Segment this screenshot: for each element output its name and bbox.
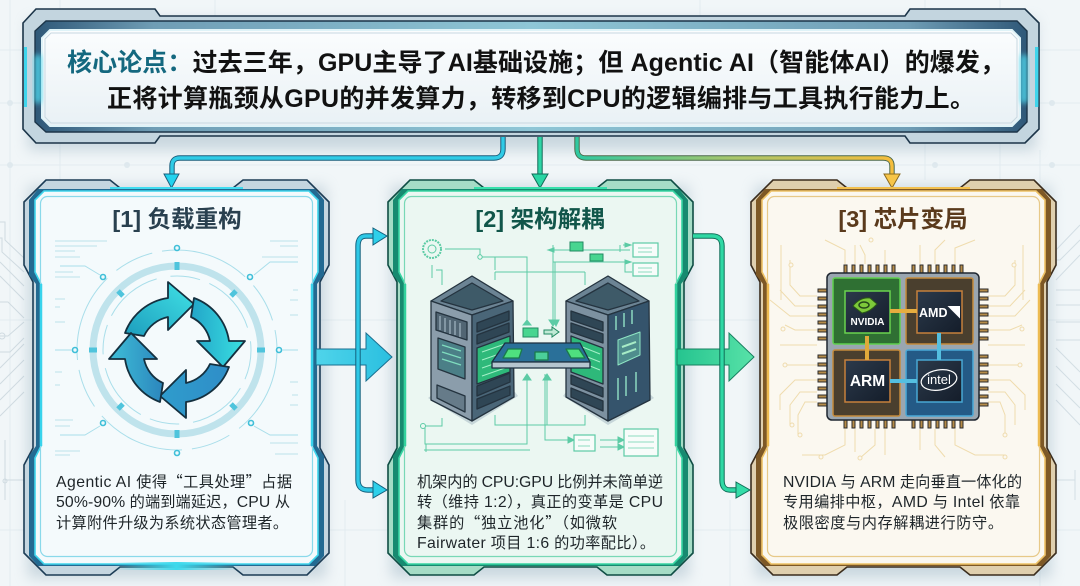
panel 1: workload — [24, 180, 329, 575]
text: panel 1 body: Agentic AI 使得“工具处理”占据 — [56, 470, 292, 492]
chip tile: ARM: ARM — [850, 373, 885, 390]
text: panel 2 body: 集群的“独立池化”（如微软 — [417, 511, 617, 533]
text: panel 2 body: 机架内的 CPU:GPU 比例并未简单逆 — [417, 474, 663, 491]
panel: core thesis — [23, 9, 1039, 143]
text: panel 2 body: 转（维持 1:2），真正的变革是 CPU — [417, 494, 663, 511]
arrow: panel 2 to panel 3 branches — [693, 236, 750, 498]
panel 3: chips — [751, 180, 1056, 575]
icon: left server rack — [428, 276, 518, 425]
arrow: thesis to panel 2 — [532, 137, 548, 188]
icon: pooled memory bridge — [492, 343, 590, 368]
chip tile: AMD: AMD◥ — [919, 305, 960, 320]
chart: telemetry ring — [55, 241, 298, 456]
text: panel 3 body: 专用编排中枢，AMD 与 Intel 依靠 — [783, 494, 1020, 511]
chip tile: Intel: intel — [927, 372, 951, 387]
text: panel 2 body: Fairwater 项目 1:6 的功率配比）。 — [417, 535, 655, 552]
icon: chip pins — [818, 265, 988, 428]
text: panel 3 body: 极限密度与内存解耦进行防守。 — [783, 515, 1003, 532]
panel 2: architecture — [388, 180, 693, 575]
circuit traces: right margin — [1056, 225, 1080, 500]
chip: processor body — [827, 273, 979, 420]
thesis text: 核心论点：过去三年，GPU主导了AI基础设施；但 Agentic AI（智能体AI）的爆发， — [67, 49, 1005, 77]
arrow: panel 1 to panel 2 main — [316, 333, 392, 381]
heading: panel 1: [1] 负载重构 — [112, 206, 242, 232]
diagram: gold circuit traces — [770, 238, 1030, 460]
thesis text — [67, 49, 1005, 113]
chip tile: Intel — [906, 350, 973, 416]
arrow: thesis to panel 1 — [164, 137, 503, 188]
text: panel 3 body: NVIDIA 与 ARM 走向垂直一体化的 — [783, 474, 1022, 491]
heading: panel 2: [2] 架构解耦 — [475, 206, 605, 232]
arrow: thesis to panel 3 — [577, 137, 900, 188]
arrow: panel 2 to panel 3 main — [677, 333, 754, 381]
circuit traces: left margin — [0, 222, 24, 500]
chip tile: ARM — [833, 350, 900, 416]
icon: cycle arrows — [109, 282, 245, 418]
diagram: decoupling network lines — [420, 240, 658, 456]
thesis text: 正将计算瓶颈从GPU的并发算力，转移到CPU的逻辑编排与工具执行能力上。 — [107, 85, 975, 113]
arrow: panel 1 to panel 2 branches — [358, 228, 387, 498]
chip tile: AMD — [906, 278, 973, 344]
heading: panel 3: [3] 芯片变局 — [838, 205, 968, 232]
text: panel 1 body: 计算附件升级为系统状态管理者。 — [56, 514, 288, 532]
text: panel 1 body: 50%-90% 的端到端延迟，CPU 从 — [56, 494, 290, 511]
icon: right server rack — [563, 276, 654, 425]
chip tile: NVIDIA: NVIDIA — [851, 317, 884, 328]
chip tile: NVIDIA — [833, 278, 900, 344]
